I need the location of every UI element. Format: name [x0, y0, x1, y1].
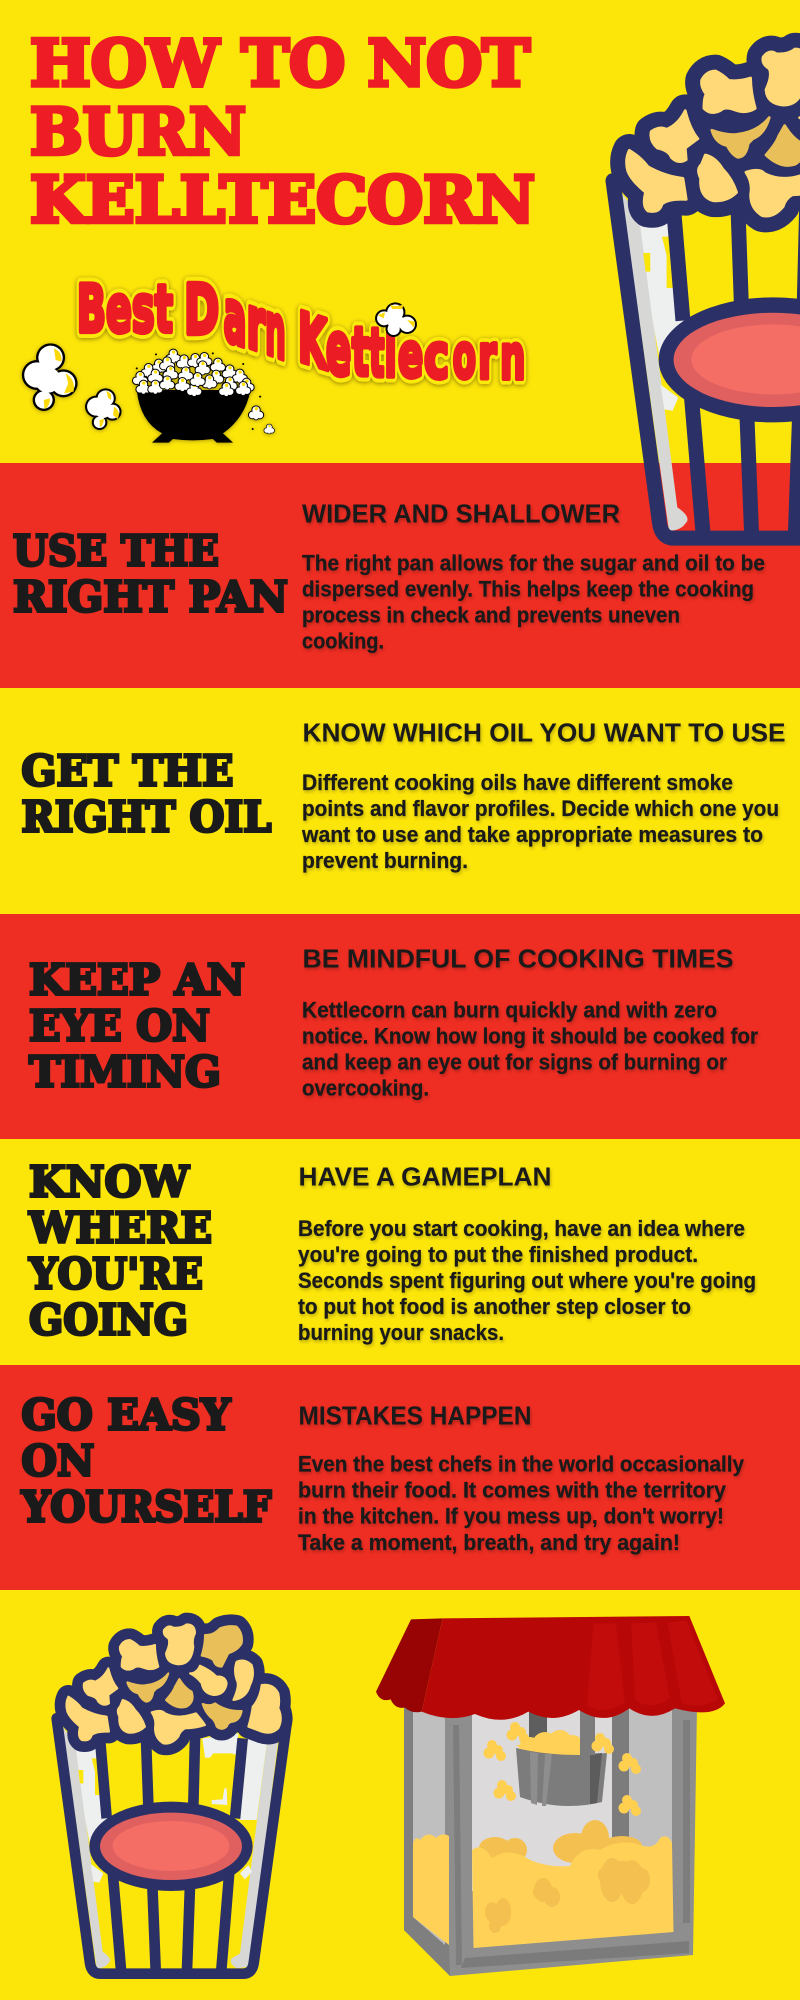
text block: wider and shallower: The right pan allows for the sugar and oil to be [302, 551, 765, 576]
heading: go easy on yourself: GO EASY [21, 1390, 231, 1440]
logo: best darn kettlecorn [22, 270, 525, 443]
heading: know where you're going: GOING [29, 1296, 188, 1344]
text block: mistakes happen: Take a moment, breath, and try again! [298, 1530, 680, 1555]
text block: know which oil: Different cooking oils have different smoke [302, 770, 733, 795]
icon: popcorn bucket, large top right [613, 49, 800, 538]
text block: have a gameplan: Seconds spent figuring out where you're going [298, 1268, 756, 1293]
heading: get the right oil: RIGHT OIL [21, 792, 271, 842]
text block: know which oil: prevent burning. [302, 848, 468, 873]
text block: know which oil [301, 718, 786, 873]
text block: wider and shallower [302, 499, 765, 654]
logo wordmark: K [298, 297, 328, 387]
title [30, 26, 535, 238]
heading: get the right oil [21, 746, 271, 842]
bucket side panels [63, 1727, 279, 1968]
logo wordmark: r [247, 278, 265, 370]
machine post inner line [453, 1725, 462, 1965]
icon: top popped kernel [375, 302, 417, 337]
heading: keep an eye on timing: KEEP AN [29, 956, 245, 1004]
text block: have a gameplan: burning your snacks. [298, 1320, 504, 1345]
bucket label oval [89, 1802, 253, 1891]
logo wordmark: n [500, 321, 525, 393]
kettle right pole [580, 1710, 595, 1755]
text block: have a gameplan: HAVE A GAMEPLAN [298, 1162, 552, 1192]
popcorn kernels [66, 1624, 281, 1744]
machine right post [612, 1706, 629, 1871]
text block: wider and shallower: dispersed evenly. This helps keep the cooking [302, 577, 754, 602]
icon: medium popped kernel [85, 388, 122, 430]
machine right slot [683, 1720, 690, 1923]
logo wordmark: e [398, 321, 423, 392]
text block: wider and shallower: process in check and prevents uneven [302, 603, 680, 628]
bucket stripes [100, 1738, 243, 1970]
heading: get the right oil: GET THE [21, 746, 233, 796]
heading: know where you're going [28, 1158, 212, 1344]
text block: mistakes happen: burn their food. It comes with the territory [298, 1478, 726, 1503]
logo wordmark: t [352, 313, 369, 391]
title: HOW TO NOT [30, 26, 530, 102]
text block: cooking times [302, 944, 758, 1101]
text block: wider and shallower: WIDER AND SHALLOWER [302, 499, 620, 529]
text block: mistakes happen: Even the best chefs in the world occasionally [298, 1452, 744, 1477]
text block: have a gameplan: Before you start cooking, have an idea where [298, 1216, 745, 1241]
logo wordmark: n [265, 286, 286, 378]
machine support poles [529, 1710, 547, 1745]
title: BURN [30, 95, 246, 170]
machine left yellow popcorn [413, 1834, 449, 1945]
heading: know where you're going: KNOW [29, 1158, 190, 1206]
text block: wider and shallower: cooking. [302, 629, 384, 654]
icon: large popped kernel [22, 343, 78, 411]
logo wordmark: c [424, 321, 449, 392]
icon: black kettle with popcorn [132, 349, 275, 443]
heading: use the right pan [13, 526, 288, 622]
machine centre window [472, 1706, 612, 1891]
text block: have a gameplan: you're going to put the finished product. [298, 1242, 698, 1267]
machine left glass [413, 1706, 445, 1945]
heading: use the right pan: RIGHT PAN [13, 572, 288, 622]
heading: know where you're going: WHERE [28, 1204, 212, 1252]
heading: keep an eye on timing [29, 956, 245, 1096]
machine popcorn pile [472, 1820, 674, 1948]
text block: mistakes happen: MISTAKES HAPPEN [298, 1400, 532, 1430]
heading: go easy on yourself: ON [21, 1436, 94, 1486]
icon: popcorn bucket, bottom left [57, 1624, 287, 1974]
red band: keep an eye on timing [0, 914, 800, 1139]
logo wordmark: t [369, 315, 384, 393]
heading: use the right pan: USE THE [13, 526, 219, 576]
logo wordmark: a [224, 270, 246, 365]
text block: have a gameplan [298, 1162, 756, 1345]
machine frame [404, 1706, 697, 1976]
logo wordmark: r [478, 322, 496, 394]
logo wordmark: Best [77, 272, 173, 348]
logo wordmark: o [453, 321, 476, 393]
text block: cooking times: and keep an eye out for signs of burning or [302, 1050, 727, 1075]
text block: mistakes happen [298, 1400, 744, 1555]
heading: go easy on yourself [20, 1390, 272, 1532]
text block: cooking times: overcooking. [302, 1076, 429, 1101]
text block: know which oil: want to use and take appropriate measures to [301, 822, 763, 847]
text block: cooking times: BE MINDFUL OF COOKING TIMES [302, 944, 734, 974]
red band: use the right pan [0, 463, 800, 688]
logo wordmark: l [385, 319, 397, 391]
red band: go easy on yourself [0, 1365, 800, 1590]
text block: cooking times: Kettlecorn can burn quickly and with zero [302, 998, 717, 1023]
machine base shading [461, 1941, 689, 1968]
heading: go easy on yourself: YOURSELF [20, 1482, 272, 1532]
text block: know which oil: KNOW WHICH OIL YOU WANT TO USE [302, 718, 786, 748]
title: KELLTECORN [30, 163, 535, 238]
machine right glass [629, 1706, 672, 1871]
machine left frame shading [404, 1706, 450, 1976]
logo wordmark: e [326, 304, 351, 393]
popcorn silhouette [66, 1624, 281, 1744]
bucket outline [57, 1718, 287, 1974]
heading: keep an eye on timing: EYE ON [29, 1002, 210, 1050]
logo wordmark: D [184, 271, 219, 350]
heading: know where you're going: YOU'RE [28, 1250, 203, 1298]
machine awning [376, 1616, 725, 1720]
flying popcorn [484, 1722, 641, 1816]
icon: popcorn machine [376, 1616, 725, 1976]
logo wordmark [77, 270, 525, 394]
heading: keep an eye on timing: TIMING [29, 1048, 221, 1096]
kettle popcorn [516, 1730, 585, 1761]
text block: cooking times: notice. Know how long it should be cooked for [302, 1024, 758, 1049]
kettle [516, 1748, 607, 1806]
text block: have a gameplan: to put hot food is another step closer to [298, 1294, 691, 1319]
text block: mistakes happen: in the kitchen. If you mess up, don't worry! [298, 1504, 724, 1529]
